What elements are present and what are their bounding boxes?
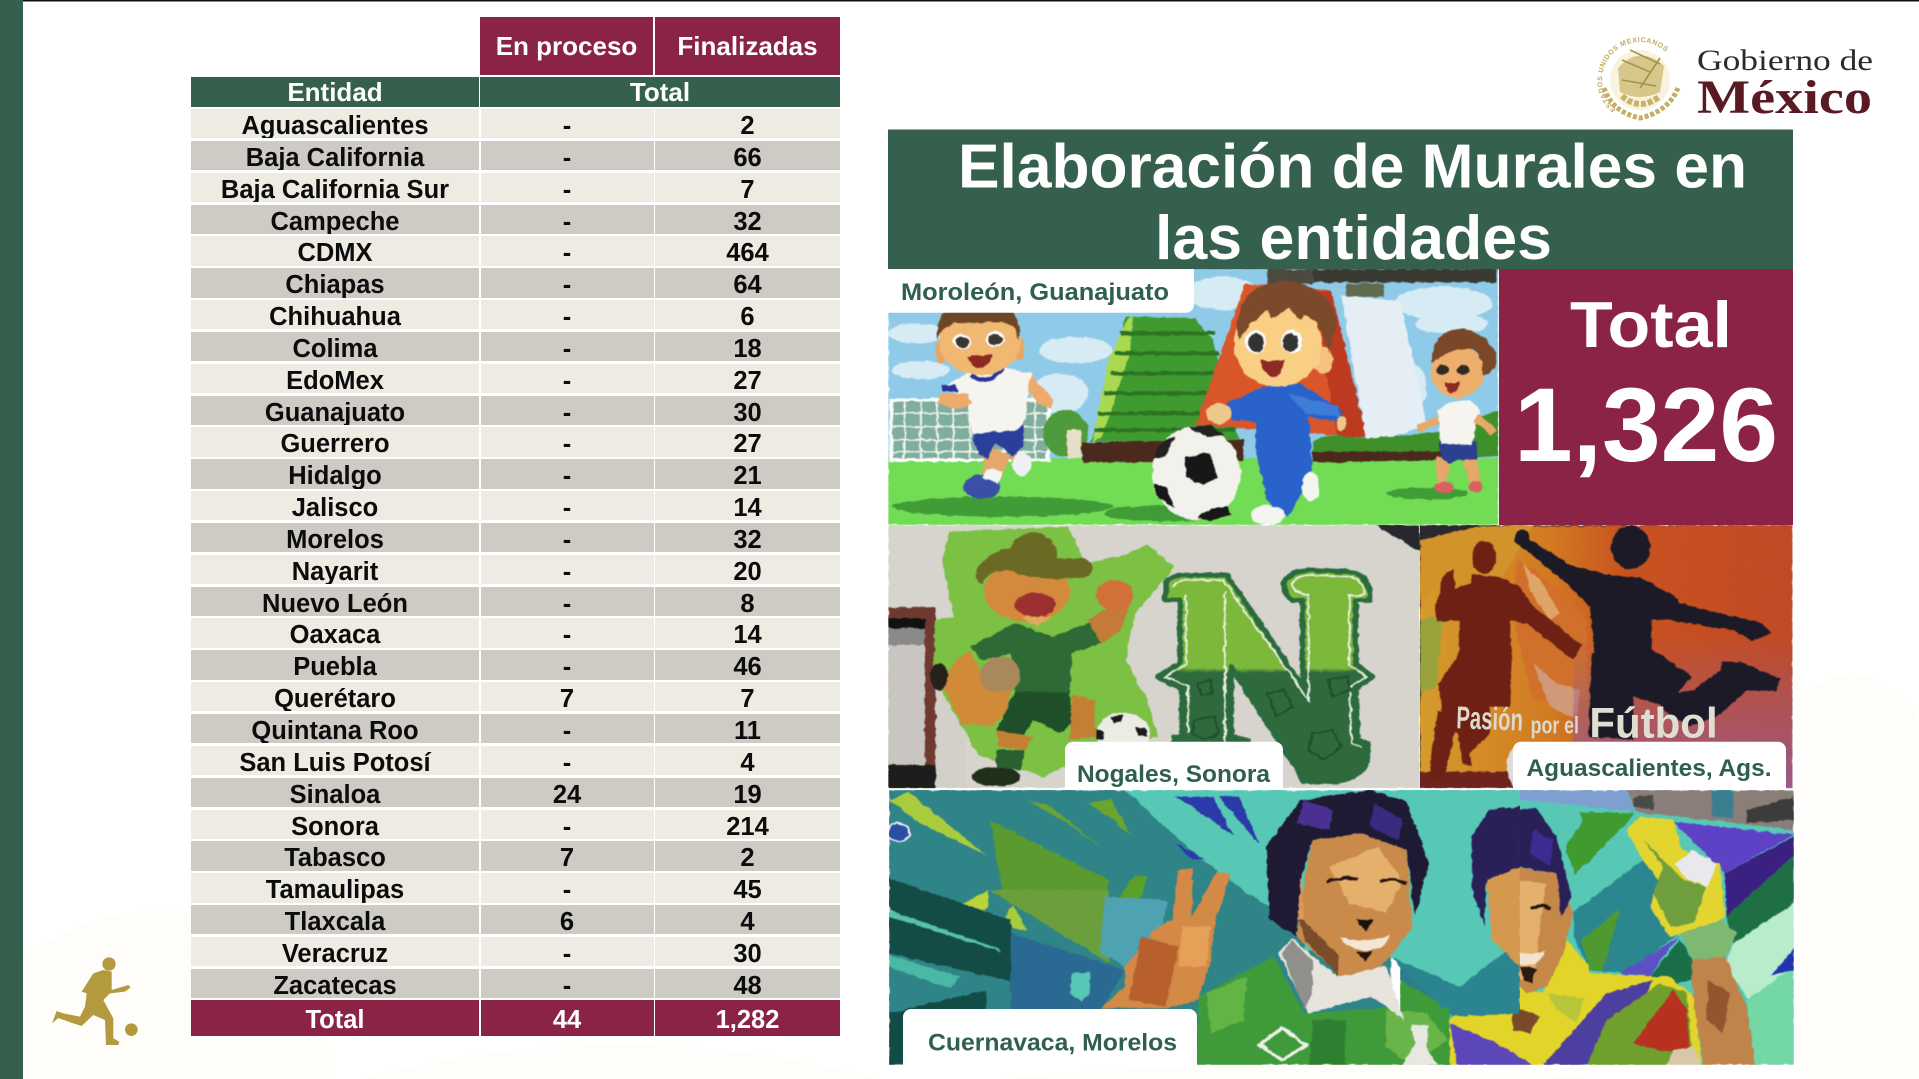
location label: Cuernavaca: Cuernavaca, Morelos [928, 1030, 1177, 1056]
row: Nayarit [191, 555, 840, 584]
header: En proceso: En proceso [496, 31, 637, 61]
location label: Aguascalientes: Aguascalientes, Ags. [1526, 755, 1772, 782]
row: Campeche [191, 205, 840, 234]
title text: las entidades [1155, 204, 1552, 273]
row: Total: 1,282 [716, 1006, 779, 1034]
location label: Nogales [1065, 742, 1283, 796]
row: EdoMex [191, 364, 840, 393]
header: En proceso [480, 17, 653, 75]
row: Aguascalientes [191, 109, 840, 138]
row: Total: Total [305, 1006, 365, 1034]
row: Baja California [191, 141, 840, 170]
row: Tlaxcala [191, 905, 840, 934]
location label: Aguascalientes [1513, 742, 1786, 789]
header: Finalizadas: Finalizadas [677, 31, 818, 61]
row: Baja California Sur [191, 173, 840, 202]
row: Sinaloa [191, 778, 840, 807]
title banner [888, 130, 1793, 273]
row: Tamaulipas [191, 873, 840, 903]
row: Morelos [191, 523, 840, 552]
text: México: México [1697, 71, 1872, 124]
header: Total: Total [630, 77, 690, 107]
row: San Luis Potosí [191, 746, 840, 775]
icon: soccer player [52, 957, 138, 1045]
mural photo: Nogales, Sonora [888, 525, 1420, 796]
row: Oaxaca [191, 618, 840, 648]
location label: Moroleón: Moroleón, Guanajuato [901, 279, 1169, 306]
panel: total 1,326 [1499, 269, 1793, 525]
row: Colima [191, 332, 840, 361]
title text: Elaboración de Murales en [958, 132, 1747, 202]
row: CDMX [191, 236, 840, 266]
header: Total [480, 77, 840, 107]
row: Chiapas [191, 268, 840, 298]
row: Guerrero [191, 427, 840, 457]
row: Guanajuato [191, 396, 840, 425]
header: Finalizadas [655, 17, 840, 75]
icon: national seal: ESTADOS UNIDOS MEXICANOS [1597, 37, 1668, 112]
mural photo: Aguascalientes, Ags.: por el [1531, 712, 1579, 739]
row: Hidalgo [191, 459, 840, 489]
mural photo: Aguascalientes, Ags. [1400, 525, 1793, 789]
row: Veracruz [191, 937, 840, 966]
row: Querétaro [191, 682, 840, 711]
mural photo: Moroleón, Guanajuato [888, 269, 1498, 525]
row: Nuevo León [191, 587, 840, 616]
table: murales por entidad [191, 17, 840, 1036]
mural photo: Aguascalientes, Ags.: Pasión [1456, 699, 1524, 738]
header: Entidad [191, 77, 479, 107]
row: Tabasco [191, 841, 840, 871]
row: Quintana Roo [191, 714, 840, 743]
row: Total: 44 [553, 1006, 581, 1034]
row: Zacatecas [191, 969, 840, 998]
row: Total [191, 1000, 840, 1036]
mural photo: Aguascalientes, Ags.: Fútbol [1589, 699, 1718, 747]
logo: Gobierno de México [1597, 37, 1873, 124]
row: Chihuahua [191, 300, 840, 329]
text: Total: Total [1570, 288, 1732, 361]
row: Sonora [191, 810, 840, 839]
location label: Moroleón [888, 269, 1194, 313]
location label: Cuernavaca [903, 1009, 1197, 1065]
number: 1,326: 1,326 [1514, 367, 1778, 484]
text: Gobierno de: Gobierno de [1697, 44, 1873, 77]
mural photo: Cuernavaca, Morelos [888, 790, 1794, 1065]
row: Puebla [191, 650, 840, 680]
row: Jalisco [191, 491, 840, 520]
header: Entidad: Entidad [287, 77, 383, 107]
location label: Nogales: Nogales, Sonora [1077, 761, 1271, 788]
